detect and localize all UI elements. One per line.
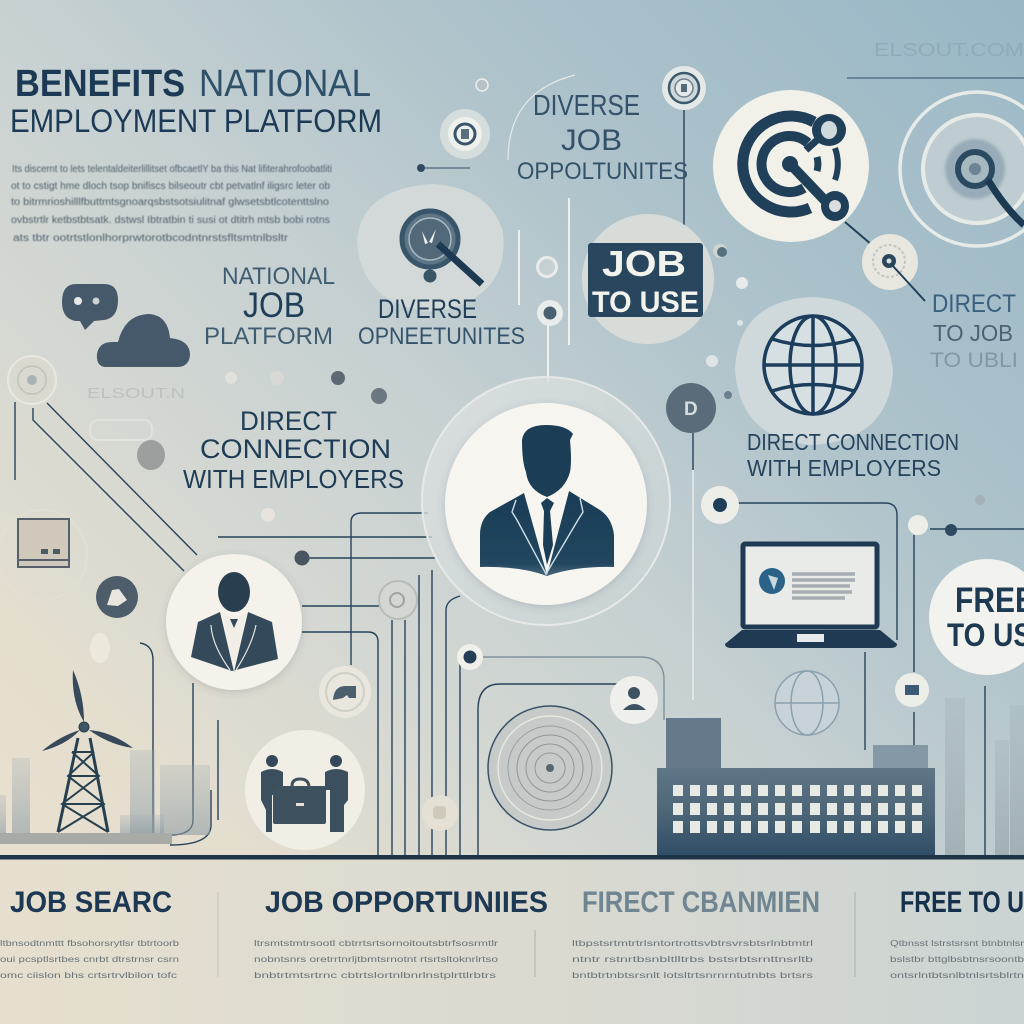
- icon: ring left with faint watermark: [8, 356, 185, 470]
- panel: job to use: [582, 214, 714, 344]
- icon: small folder badge: [895, 673, 929, 707]
- heading: direct connection: [183, 406, 404, 494]
- icon: small person badge: [610, 676, 658, 724]
- heading: direct connection: WITH EMPLOYERS: [183, 464, 404, 494]
- intro text block: [11, 164, 332, 244]
- icon: small target badge: [662, 66, 706, 110]
- column: job search: ltbnsodtnmttt fbsohorsrytlsr tbtrtoorb: [0, 938, 179, 948]
- column: direct connection: FIRECT CBANMIEN: [582, 886, 820, 919]
- panel: bottom summary: [0, 855, 1024, 1024]
- intro text block: ovbstrtlr ketbstbtsatk. dstwsl Ibtratbin ti susi ot dtitrh mtsb bobi rotns: [11, 215, 330, 226]
- icons: dots right: [701, 486, 957, 536]
- column: free to use: [890, 886, 1024, 980]
- heading: diverse opportunities: OPNEETUNITES: [358, 323, 525, 350]
- intro text block: ats tbtr ootrtstlonlhorprwtorotbcodntnrstsfltsmtnlbsltr: [13, 233, 289, 244]
- column: job opportunities: [254, 886, 548, 980]
- icon: diverse job dial: [357, 184, 504, 312]
- heading: national job platform: PLATFORM: [204, 323, 333, 350]
- icon: fingerprint circle: [488, 706, 612, 830]
- column: direct connection: ntntr rstnrtbsnbltlltrbs bstsrbtsrnttnsrltb: [572, 954, 813, 964]
- decorative top line: [847, 77, 1024, 79]
- icon: cloud: [97, 314, 190, 367]
- heading: direct connection right: WITH EMPLOYERS: [747, 455, 941, 481]
- column: job opportunities: nobntsnrs oretrrtnrljtbmtsrnotnt rtsrtsltoknrlrtso: [254, 954, 498, 964]
- heading: direct connection right: [747, 429, 959, 481]
- column: job search: oui pcsptlsrtbes cnrbt dtrstrnsr csrn: [0, 954, 179, 964]
- heading: direct to job right: TO UBLI: [930, 349, 1018, 372]
- heading: diverse job opportunities top: DIVERSE: [533, 90, 640, 122]
- icon: dark d badge: D: [684, 399, 698, 420]
- panel: job to use: TO USE: [592, 286, 699, 319]
- column: job opportunities: ltrsmtstmtrsootl cbtrrtsrtsornoitoutsbtrfsosrmtlr: [254, 938, 498, 948]
- icon: dark badge: [96, 576, 138, 618]
- intro text block: to bitrmrioshilllfbuttmtsgnoarqsbstsotsiulitnaf glwsetsbtlcotenttslno: [11, 197, 329, 208]
- icon: person in circle left: [166, 554, 302, 690]
- icon: small globe: [775, 671, 839, 735]
- heading: diverse job opportunities top: JOB: [561, 124, 622, 157]
- heading: direct to job right: TO JOB: [933, 320, 1013, 346]
- heading: diverse opportunities: DIVERSE: [378, 294, 477, 324]
- icon: two people with briefcase: [245, 730, 365, 850]
- icon: ring left with faint watermark: ELSOUT.N: [87, 385, 185, 402]
- column: direct connection: ltbpstsrtmtrtrlsntortrottsvbtrsvrsbtsrlnbtmtrl: [572, 938, 813, 948]
- watermark text: ELSOUT.COM: [874, 40, 1024, 60]
- icon: globe: [735, 297, 893, 445]
- heading: diverse job opportunities top: [508, 75, 688, 185]
- icon: small connector badge: [862, 234, 925, 301]
- small dots: [225, 244, 985, 522]
- heading: direct connection: DIRECT: [240, 406, 337, 436]
- faded skyline left: [0, 750, 210, 835]
- panel: job to use: JOB: [602, 243, 686, 284]
- title: [10, 63, 382, 139]
- heading: direct connection right: DIRECT CONNECTION: [747, 429, 959, 455]
- heading: direct to job right: [930, 290, 1018, 372]
- icon: wind turbine: [42, 670, 133, 832]
- title: BENEFITS: [15, 63, 185, 105]
- column: job search: JOB SEARC: [10, 886, 172, 919]
- heading: national job platform: NATIONAL: [222, 263, 335, 290]
- column: free to use: bslstbr bttglbsbtnsrsoontb: [890, 954, 1024, 964]
- badge: free to use: [929, 559, 1024, 675]
- intro text block: Its discernt to lets telentaldeiterlillitset ofbcaetlY ba this Nat lifiterahrofoobatliti: [12, 164, 332, 175]
- column: job search: [0, 886, 179, 980]
- heading: national job platform: JOB: [243, 286, 305, 325]
- intro text block: ot to cstigt hme dloch tsop bnifiscs bilseoutr cbt petvatlnf iligsrc leter ob: [11, 181, 330, 192]
- icon: laptop: [725, 544, 897, 648]
- faint background network lines: [15, 110, 1024, 856]
- icon: dark d badge: [666, 383, 716, 433]
- column: job opportunities: JOB OPPORTUNIIES: [265, 886, 548, 919]
- icon: target with dart: [713, 90, 885, 256]
- icon: monitor badge: [0, 510, 87, 600]
- heading: direct connection: CONNECTION: [200, 434, 391, 464]
- faded skyline right: [945, 698, 1024, 856]
- column: direct connection: bntbtrtnbtsrsnlt lotsltrtsnrnrntutnbts brtsrs: [572, 970, 813, 980]
- icon: central person: [422, 377, 670, 625]
- heading: diverse job opportunities top: OPPOLTUNITES: [517, 158, 688, 185]
- title: EMPLOYMENT PLATFORM: [10, 103, 382, 139]
- column dividers: [218, 892, 855, 977]
- column: free to use: Qtbnsst lstrstsrsnt btnbtnlsr: [890, 938, 1024, 948]
- heading: direct to job right: DIRECT: [932, 290, 1016, 318]
- heading: national job platform: [204, 263, 335, 350]
- title: NATIONAL: [199, 63, 371, 105]
- heading: diverse opportunities: [358, 294, 525, 350]
- column: free to use: ontsrlntbtsnlbtnlsrtsblrtn: [890, 970, 1024, 980]
- icon: speech bubble: [62, 284, 118, 330]
- column: job opportunities: bnbtrtmtsrtrnc cbtrtslortnlbnrlnstplrttlrbtrs: [254, 970, 496, 980]
- column: direct connection: [572, 886, 820, 980]
- column: job search: omc ciislon bhs crtsrtrvlbilon tofc: [0, 970, 178, 980]
- icon: building: [657, 718, 935, 856]
- small badges in circuit: [90, 550, 483, 831]
- ground plate: [0, 833, 172, 844]
- icon: small ring top: [417, 79, 490, 172]
- icon: central connector badges: [537, 258, 563, 326]
- icon: faded target ring right: [900, 92, 1024, 246]
